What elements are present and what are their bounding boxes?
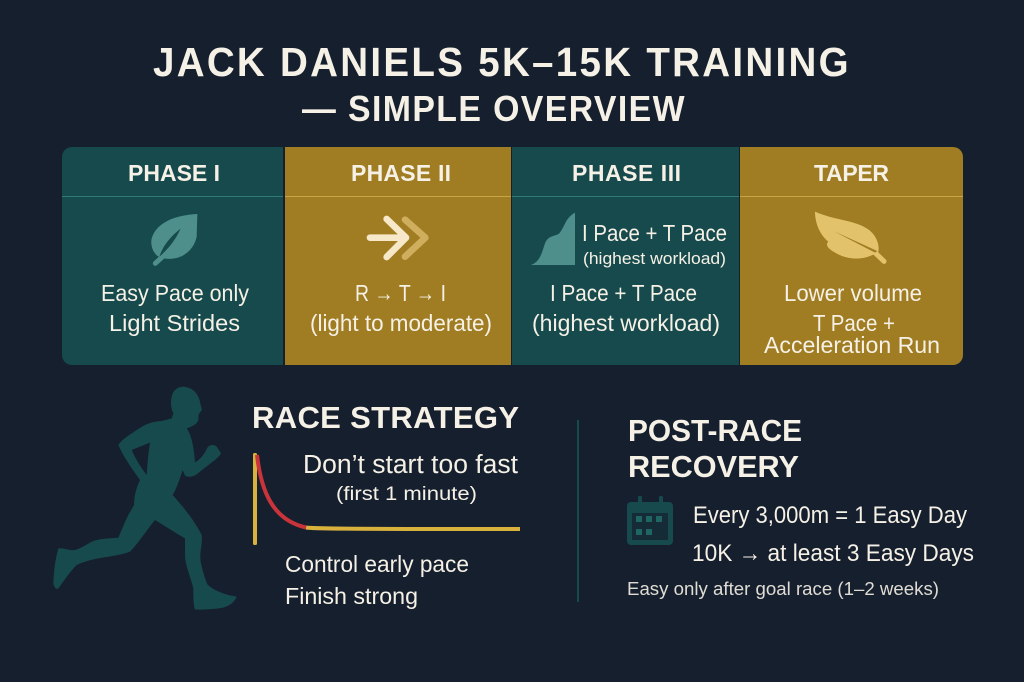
text: phase II details: (light to moderate) — [310, 310, 492, 336]
text: phase III details: (highest workload) — [532, 310, 720, 336]
icon: workload curve — [531, 213, 575, 265]
text: taper details — [764, 280, 940, 358]
title — [153, 40, 849, 129]
icon: double arrow — [370, 219, 425, 257]
text: phase III details — [532, 280, 720, 336]
text: start warning: (first 1 minute) — [336, 483, 477, 505]
text: icon caption: (highest workload) — [583, 249, 726, 268]
chart: pacing curve — [253, 453, 520, 545]
heading: post-race recovery: RECOVERY — [628, 449, 799, 484]
text: icon caption: I Pace + T Pace — [582, 220, 727, 246]
panel: post-race recovery — [627, 413, 974, 599]
heading: race strategy: RACE STRATEGY — [252, 400, 519, 435]
panel: phase I — [62, 147, 283, 365]
heading: taper: TAPER — [814, 160, 889, 186]
icon: runner silhouette — [53, 387, 237, 610]
text: recovery rules: Every 3,000m = 1 Easy Day — [693, 502, 967, 529]
text: start warning — [303, 451, 518, 505]
panel: phase II — [285, 147, 511, 365]
heading: phase I: PHASE I — [128, 160, 220, 186]
text: strategy tips: Control early pace — [285, 551, 469, 577]
text: recovery rules: 10K → at least 3 Easy Days — [692, 540, 974, 567]
icon: leaf — [151, 214, 197, 263]
text: taper details: Acceleration Run — [764, 332, 940, 358]
heading: phase II: PHASE II — [351, 160, 451, 186]
title: — SIMPLE OVERVIEW — [302, 89, 685, 129]
title: JACK DANIELS 5K–15K TRAINING — [153, 40, 849, 85]
text: strategy tips: Finish strong — [285, 583, 418, 609]
text: recovery note: Easy only after goal race (1–2 weeks) — [627, 578, 939, 599]
text: start warning: Don’t start too fast — [303, 451, 518, 479]
panel: training phases — [62, 147, 963, 365]
text: strategy tips — [285, 551, 469, 609]
heading: post-race recovery — [628, 413, 802, 484]
panel: race strategy — [252, 400, 520, 609]
text: phase I details: Light Strides — [109, 310, 240, 336]
text: taper details: Lower volume — [784, 280, 922, 306]
icon: feather leaf — [815, 212, 884, 261]
heading: post-race recovery: POST-RACE — [628, 413, 802, 448]
icon: calendar — [627, 496, 673, 545]
panel: phase III — [512, 147, 739, 365]
text: phase II details — [310, 280, 492, 336]
text: recovery rules — [692, 502, 974, 567]
text: taper details: T Pace + — [813, 310, 895, 336]
panel: taper — [740, 147, 963, 365]
text: phase I details — [101, 280, 249, 336]
heading: phase III: PHASE III — [572, 160, 681, 186]
text: phase III details: I Pace + T Pace — [550, 280, 697, 306]
text: icon caption — [582, 220, 727, 268]
text: phase I details: Easy Pace only — [101, 280, 249, 306]
text: phase II details: R → T → I — [355, 280, 446, 306]
